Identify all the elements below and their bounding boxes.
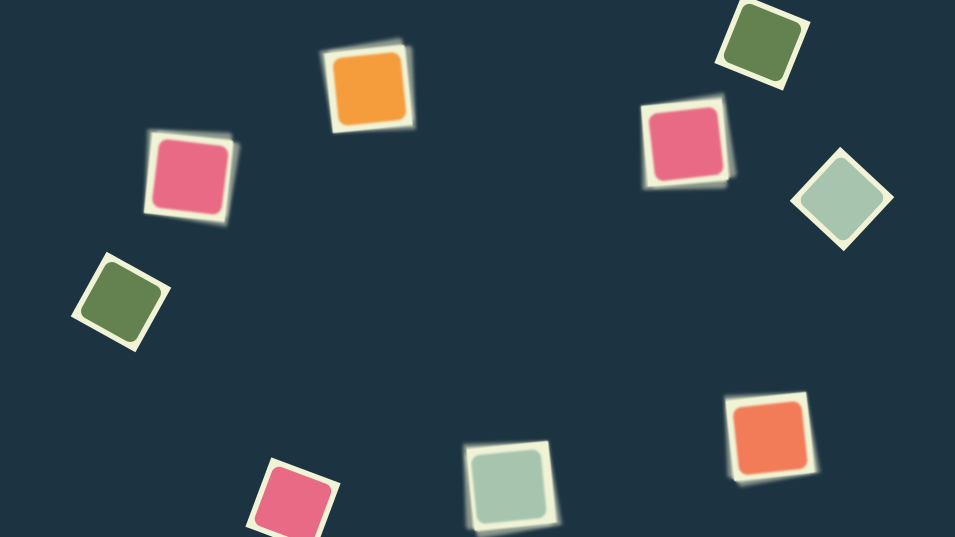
card: green, left [71, 252, 171, 352]
card: sage, far right [790, 147, 894, 251]
card: pink, upper left [144, 129, 242, 228]
card: pink, bottom left [245, 457, 341, 537]
card: pink, upper right [641, 91, 738, 190]
card: coral, lower right [724, 392, 822, 488]
card: green, top right [714, 0, 811, 91]
card: orange, top centre [318, 36, 416, 133]
card: sage, bottom centre [463, 441, 563, 537]
